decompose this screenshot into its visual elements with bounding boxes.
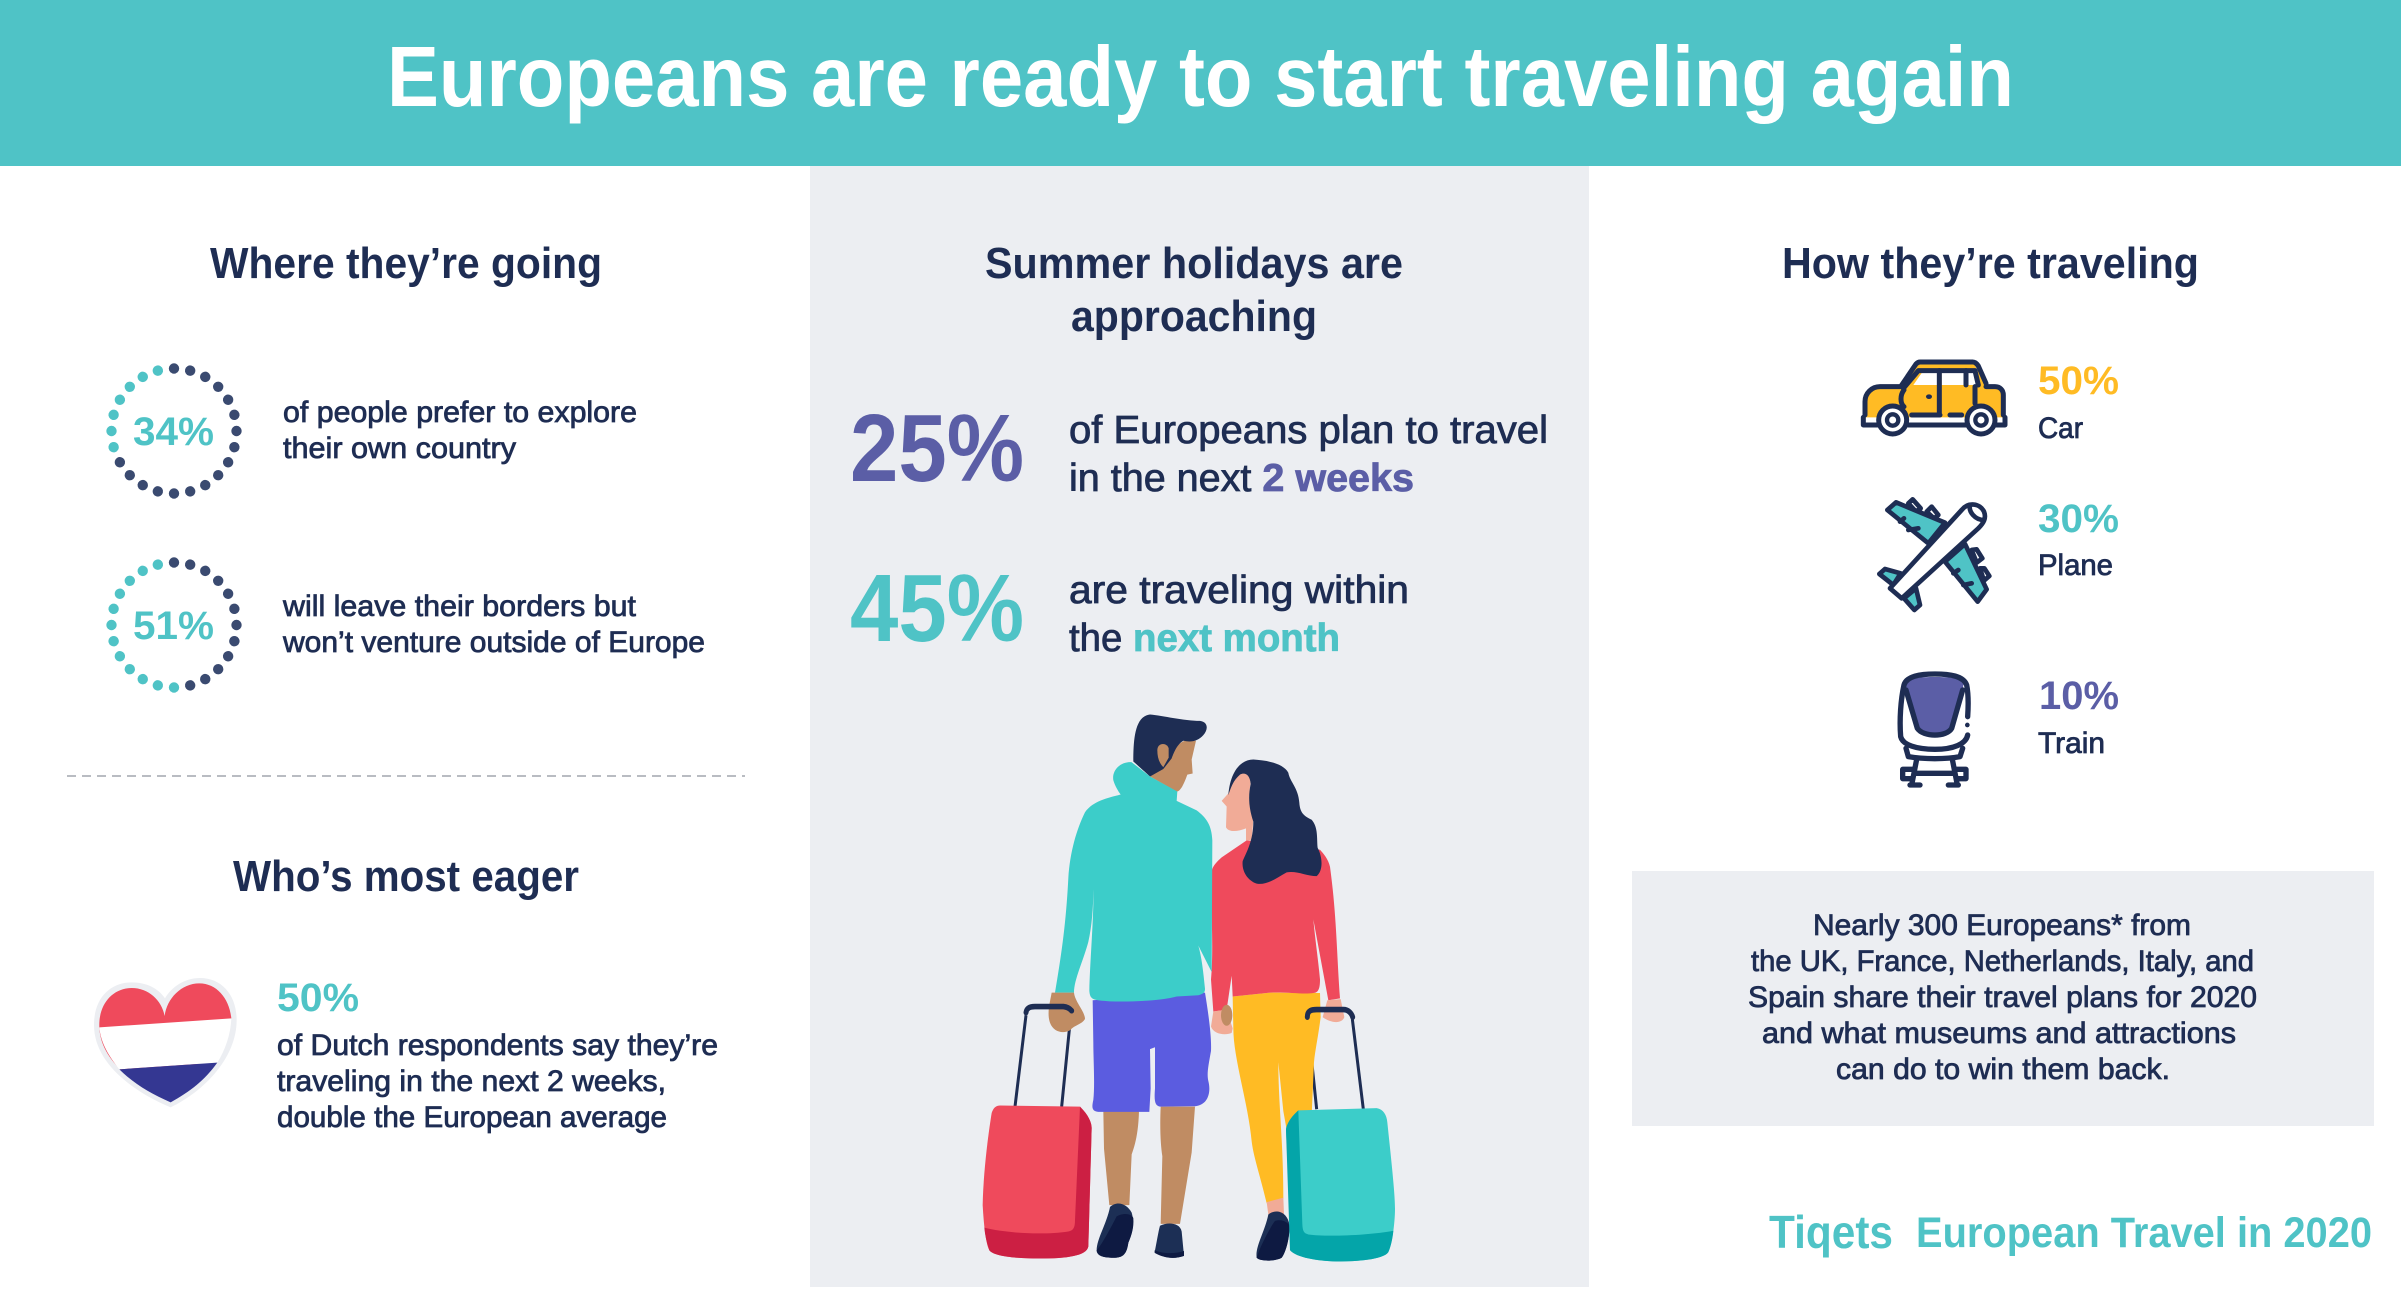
- text: 51% description: will leave their borders but: [282, 590, 637, 623]
- text: Dutch respondents description: traveling in the next 2 weeks,: [277, 1065, 666, 1098]
- stat: plane 30%: 30%: [2038, 497, 2119, 541]
- heading: summer holidays are approaching: [985, 239, 1403, 341]
- text: 34% description: of people prefer to explore: [283, 396, 637, 429]
- panel: where they're going: [106, 239, 705, 693]
- text: 25% description: [1069, 409, 1548, 500]
- text: 51% description: won’t venture outside of Europe: [282, 626, 705, 659]
- callout: survey note: the UK, France, Netherlands, Italy, and: [1751, 945, 2254, 978]
- text: 45% description: the next month: [1069, 617, 1340, 660]
- text: Dutch respondents description: [277, 1029, 718, 1134]
- stat: plane 30%: Plane: [2038, 549, 2113, 582]
- stat: 51% dotted ring: 51%: [133, 604, 214, 648]
- text: 25% description: of Europeans plan to travel: [1069, 409, 1548, 452]
- panel: who's most eager: [94, 852, 718, 1134]
- heading: how they're traveling: How they’re traveling: [1782, 239, 2199, 288]
- icon: car: [1863, 362, 2005, 434]
- illustration: couple with suitcases: [983, 714, 1395, 1262]
- text: 25% description: in the next 2 weeks: [1069, 457, 1414, 500]
- callout: survey note: and what museums and attractions: [1762, 1017, 2236, 1050]
- heading: summer holidays are approaching: Summer holidays are: [985, 239, 1403, 288]
- stat: plane 30%: [2038, 497, 2119, 582]
- stat: train 10%: [2038, 674, 2119, 760]
- callout: survey note: Nearly 300 Europeans* from: [1813, 909, 2191, 942]
- text: Dutch respondents description: double the European average: [277, 1101, 667, 1134]
- woman: [1211, 760, 1344, 1261]
- footer title: European Travel in 2020: [1916, 1209, 2372, 1257]
- stat: 25%: 25%: [850, 395, 1024, 502]
- stat: 50% Dutch: 50%: [277, 976, 359, 1020]
- icon: train: [1900, 674, 1970, 785]
- callout: survey note: Spain share their travel plans for 2020: [1748, 981, 2257, 1014]
- stat: 51% dotted ring: [106, 557, 242, 693]
- stat: 45%: 45%: [850, 555, 1024, 662]
- logo: Tiqets: Tiqets: [1769, 1206, 1893, 1258]
- callout: survey note: can do to win them back.: [1836, 1053, 2170, 1086]
- header banner: [0, 0, 2401, 166]
- text: 45% description: are traveling within: [1069, 569, 1409, 612]
- text: 34% description: [283, 396, 637, 465]
- stat: car 50%: 50%: [2038, 359, 2119, 403]
- footer: brand and source: [1769, 1206, 2372, 1258]
- teal suitcase: [1286, 1108, 1395, 1262]
- stat: car 50%: [2038, 359, 2119, 445]
- stat: train 10%: 10%: [2039, 674, 2119, 718]
- stat: train 10%: Train: [2038, 727, 2105, 760]
- title: Europeans are ready to start traveling again: [387, 30, 2014, 125]
- icon: plane: [1879, 499, 1989, 610]
- teal suitcase handle: [1307, 1019, 1363, 1109]
- panel: summer holidays: [810, 166, 1589, 1287]
- stat: 34% dotted ring: [106, 363, 242, 499]
- callout: survey note: [1632, 871, 2374, 1126]
- heading: where they're going: Where they’re going: [210, 239, 602, 288]
- heading: who's most eager: Who’s most eager: [233, 852, 579, 901]
- man: [1049, 714, 1232, 1258]
- panel: how they're traveling: [1632, 239, 2374, 1258]
- text: 45% description: [1069, 569, 1409, 660]
- text: Dutch respondents description: of Dutch respondents say they’re: [277, 1029, 718, 1062]
- text: 34% description: their own country: [283, 432, 516, 465]
- suitcase grips: [1026, 1007, 1353, 1017]
- stat: car 50%: Car: [2038, 412, 2083, 445]
- stat: 34% dotted ring: 34%: [133, 410, 214, 454]
- icon: Dutch flag heart: [94, 978, 237, 1107]
- text: 51% description: [282, 590, 705, 659]
- heading: summer holidays are approaching: approaching: [1071, 292, 1317, 341]
- red suitcase: [983, 1015, 1092, 1259]
